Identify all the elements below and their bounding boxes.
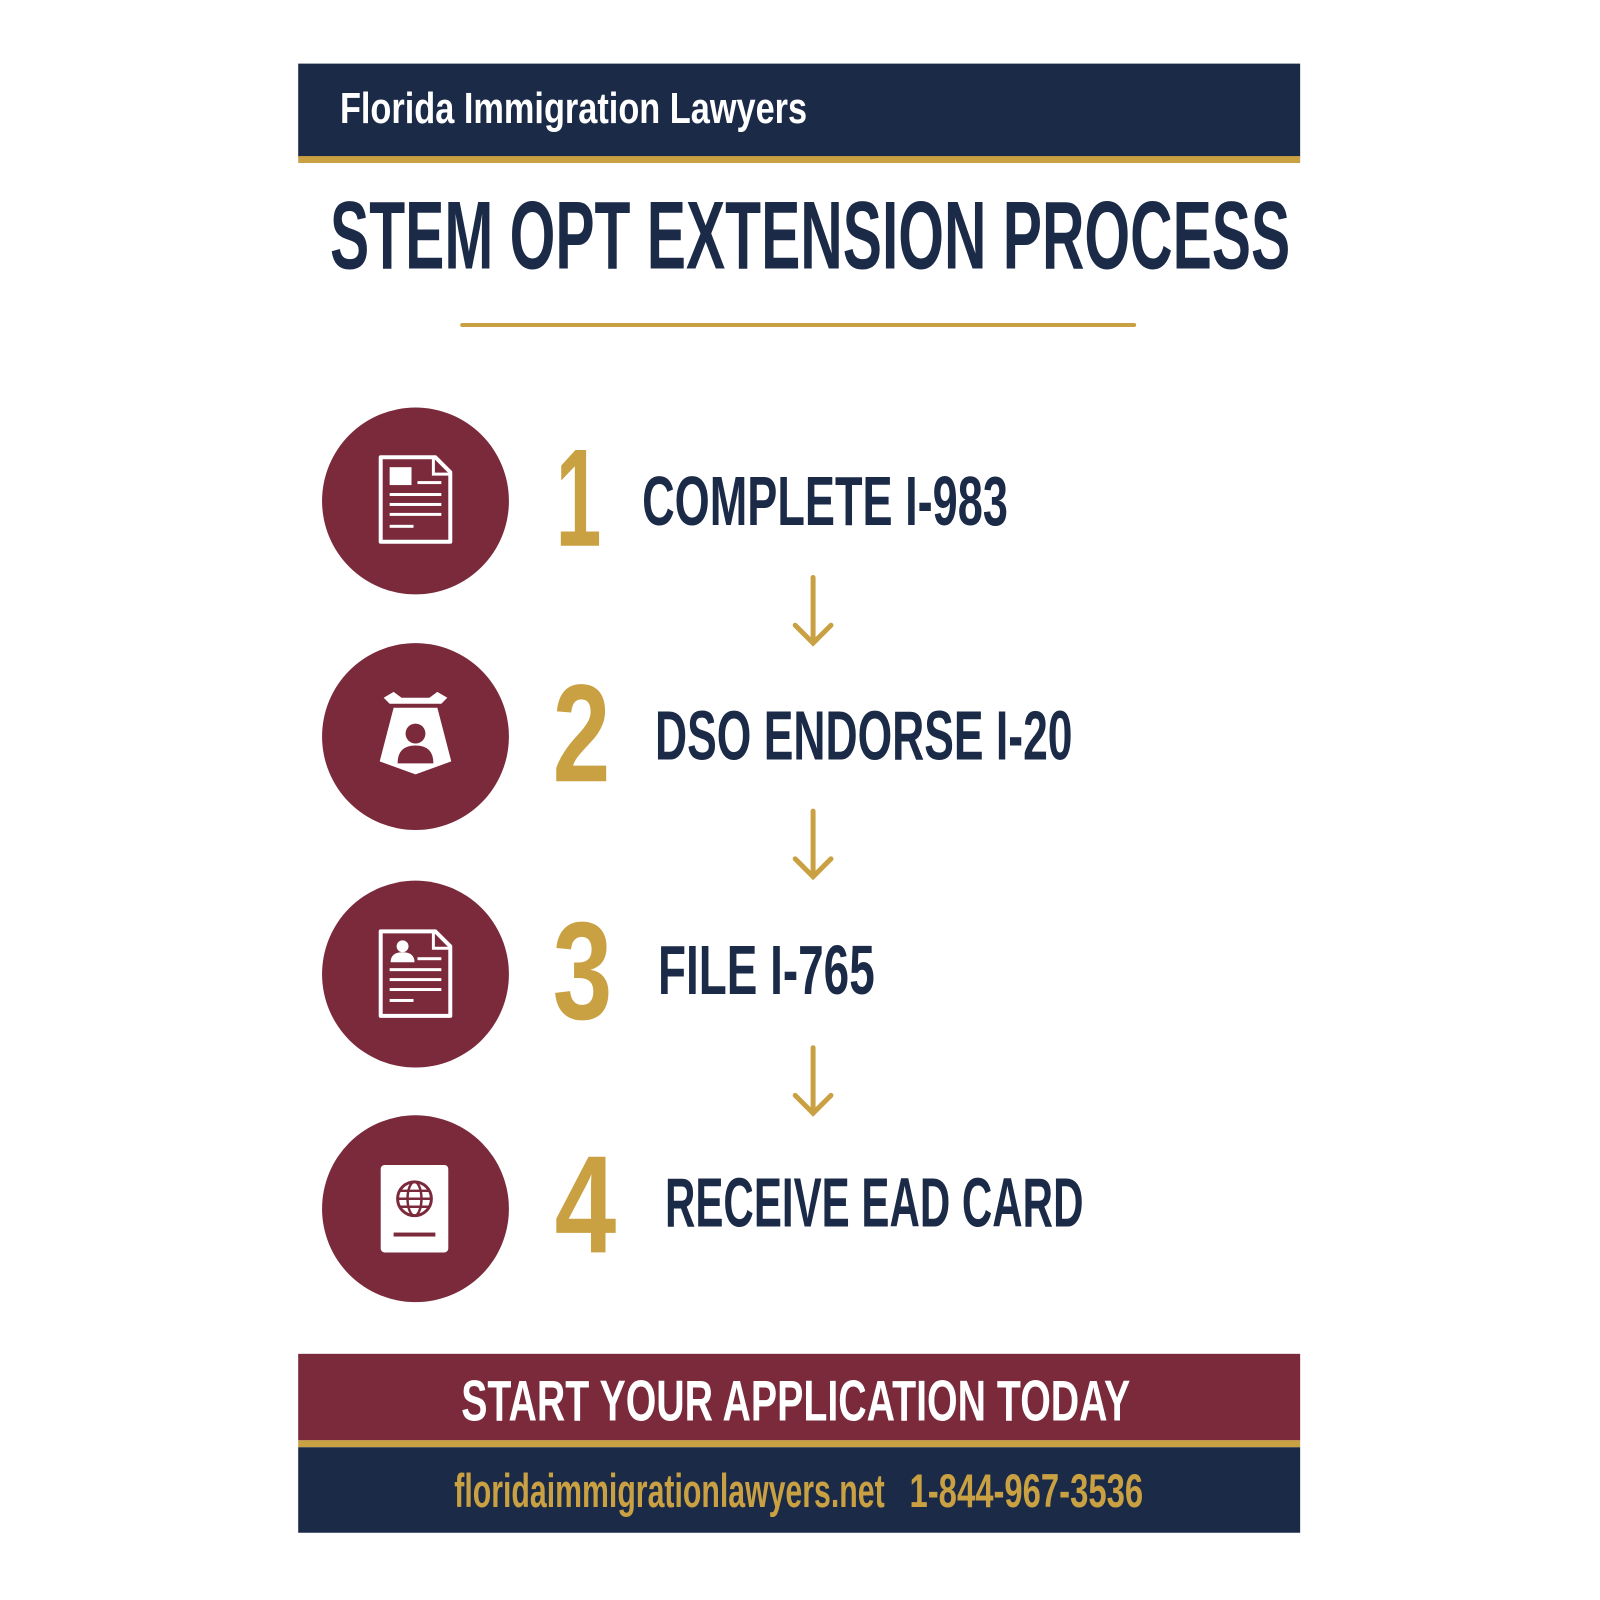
number 1: 1 bbox=[556, 421, 601, 576]
icon: document bbox=[322, 408, 509, 594]
arrow 3 bbox=[795, 1048, 831, 1113]
contact phone: 1-844-967-3536 bbox=[910, 1465, 1143, 1518]
footer banner bbox=[298, 1354, 1300, 1533]
icon: passport bbox=[322, 1115, 509, 1302]
contact website: floridaimmigrationlawyers.net bbox=[454, 1465, 885, 1518]
icon: form with person bbox=[322, 881, 509, 1068]
step 3 bbox=[322, 881, 875, 1068]
number 4: 4 bbox=[555, 1127, 616, 1282]
arrow 1 bbox=[795, 578, 831, 643]
number 2: 2 bbox=[553, 656, 610, 811]
call to action: START YOUR APPLICATION TODAY bbox=[461, 1369, 1130, 1433]
step 2 label: DSO ENDORSE I-20 bbox=[655, 696, 1073, 774]
title underline bbox=[460, 323, 1136, 327]
step 4 label: RECEIVE EAD CARD bbox=[665, 1164, 1083, 1242]
step 2 bbox=[322, 643, 1073, 830]
arrow 2 bbox=[795, 811, 831, 877]
header text: Florida Immigration Lawyers bbox=[340, 84, 807, 133]
step 4 bbox=[322, 1115, 1083, 1302]
step 1 label: COMPLETE I-983 bbox=[642, 462, 1008, 540]
step 1 bbox=[322, 408, 1008, 594]
step 3 label: FILE I-765 bbox=[658, 931, 875, 1009]
icon: DSO badge bbox=[322, 643, 509, 830]
number 3: 3 bbox=[553, 894, 612, 1049]
header bar bbox=[298, 64, 1300, 163]
